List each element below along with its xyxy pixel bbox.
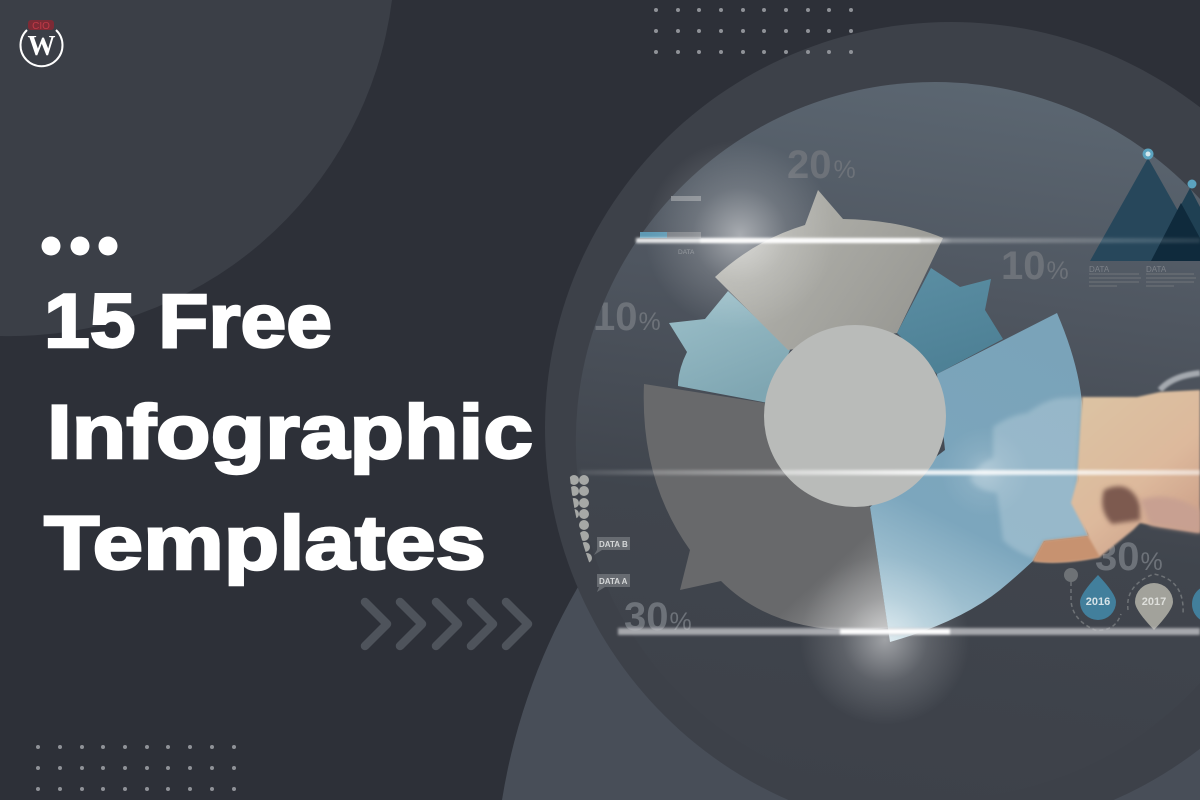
ghost fingers: [970, 397, 1088, 558]
large ring circle: [545, 22, 1200, 800]
title: Templates: [44, 501, 486, 586]
timeline icons: [1064, 568, 1200, 630]
sector: warm gray: [715, 190, 943, 350]
sector: light teal: [669, 291, 790, 403]
light streaks: [580, 238, 1200, 635]
triangle chart: DATA: [1089, 265, 1110, 274]
center circle: [764, 325, 946, 507]
data tags: DATA A: [599, 577, 628, 586]
drop: 2016: [1080, 575, 1116, 620]
percent labels: [593, 143, 1163, 639]
title: Infographic: [47, 390, 533, 475]
timeline icons: 2016: [1086, 596, 1110, 608]
percent labels: 30%: [1095, 535, 1163, 579]
sector: light blue: [870, 313, 1088, 642]
percent labels: 10%: [1001, 244, 1069, 288]
title: [44, 279, 533, 586]
dot grid: bottom: [36, 745, 236, 791]
chevron arrows: [365, 602, 528, 646]
top-left background circle: [0, 0, 392, 336]
data tags: DATA B: [599, 540, 628, 549]
sector: dark gray: [644, 384, 888, 630]
pie chart: [644, 190, 1088, 642]
logo: [21, 20, 63, 66]
pin: 2017: [1135, 583, 1173, 630]
small bar legend: DATA: [678, 249, 695, 256]
data tags: [594, 537, 630, 592]
logo: W: [28, 31, 56, 62]
dot grid: top: [654, 8, 853, 54]
title dots: [42, 236, 118, 256]
glows: [660, 155, 1007, 714]
percent labels: 20%: [787, 143, 856, 187]
sector: teal: [897, 268, 1003, 374]
small bar legend: [640, 196, 701, 256]
title: 15 Free: [44, 279, 332, 364]
triangle chart: DATA: [1146, 265, 1167, 274]
photo panel: hand touching pie chart: [570, 82, 1200, 716]
logo: CIO: [32, 21, 50, 32]
dot column: [569, 475, 592, 563]
triangle chart: [1089, 148, 1200, 286]
percent labels: 30%: [624, 595, 692, 639]
hand: [1033, 373, 1200, 562]
percent labels: 10%: [593, 295, 661, 339]
drop: next year: [1192, 588, 1200, 620]
timeline icons: 2017: [1142, 596, 1166, 608]
bottom background circle: [502, 279, 1200, 800]
